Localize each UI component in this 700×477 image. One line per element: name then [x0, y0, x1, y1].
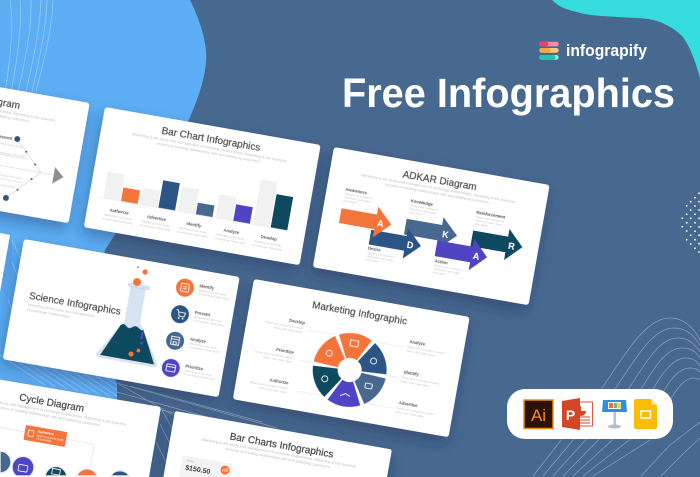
item: present [170, 304, 227, 331]
stage labels: resources, and make [344, 195, 371, 204]
intro text: process of creating relationships with and satisfying customers. [226, 447, 331, 469]
stage labels: Target your company's [344, 192, 374, 201]
item: analyze: Analyze [190, 336, 207, 344]
background contour lines: bottom right [533, 318, 700, 476]
heading: Bar Charts Infographics [229, 431, 334, 461]
bar labels: Marketing is the study [104, 213, 133, 221]
stage labels: Target your company's [475, 215, 505, 224]
bar labels: Marketing is the study [254, 239, 283, 248]
stage labels: Reinforcement [476, 210, 506, 220]
cycle nodes [0, 451, 129, 476]
logo wordmark: infograpify [566, 42, 648, 60]
bar labels: Analyze [223, 227, 240, 235]
stage labels: Action [434, 258, 448, 266]
stage labels: sure plans [366, 257, 380, 264]
item: prioritize [160, 358, 217, 385]
card text and box [0, 384, 129, 474]
arrow: R: R [507, 241, 516, 252]
bar labels: of exchange relationship [102, 216, 134, 226]
background lines: left diagonals [0, 240, 117, 397]
intro text: Marketing is the study and management of exchange relationships. Marketing is the business [202, 438, 357, 469]
decoration: dot pattern [681, 192, 700, 253]
labels right: share, and make plans [406, 348, 436, 358]
item: identify: of exchange relationship [198, 292, 230, 301]
background blob: light blue [0, 0, 206, 400]
box: authorize [23, 425, 67, 447]
labels right: Target your company's market [406, 345, 445, 355]
item: identify: Identify [199, 283, 215, 291]
panel: ADKAR diagram [313, 147, 550, 305]
labels left: Prioritize [276, 347, 295, 355]
bar labels: of exchange relationship [176, 229, 208, 239]
bar labels: Marketing is the study [141, 219, 170, 228]
item: analyze [165, 330, 222, 358]
intro text: process of creating relationships with and satisfying customers. [156, 142, 261, 164]
icon: flask [96, 262, 173, 367]
icon: PowerPoint: P [566, 407, 575, 423]
stage labels: Knowledge [410, 198, 434, 207]
arrow: A orange: A [376, 218, 385, 229]
arrow: D: D [406, 240, 415, 251]
node icons [18, 464, 60, 475]
labels left [248, 313, 306, 396]
item: identify: Marketing is the study [198, 288, 227, 297]
item: prioritize: Marketing is the study [184, 368, 213, 377]
main title: Free Infographics [342, 70, 675, 116]
stage labels: resources, and make [475, 218, 502, 227]
labels right: Target your company's market [395, 406, 434, 416]
stage labels: sure plans [474, 222, 488, 228]
item: present: Present [194, 310, 211, 318]
panel: app icons [507, 389, 673, 439]
arrow: D [367, 222, 424, 261]
bar labels: Marketing is the study [216, 232, 245, 241]
background blob: teal corner [552, 0, 700, 78]
bar labels: of exchange relationship [251, 243, 283, 252]
arrow: A purple: A [472, 251, 481, 262]
icon: PowerPoint [562, 398, 592, 430]
stage labels: Target your company's [434, 263, 463, 272]
box: authorize: of exchange [36, 436, 52, 443]
heading: ADKAR Diagram [402, 169, 478, 193]
stage labels: sure plans [409, 210, 423, 216]
card body [163, 411, 392, 477]
labels right: share, and make plans [400, 379, 430, 388]
intro text: Marketing is the study and management [27, 303, 95, 318]
labels left: Target your company's market [254, 349, 293, 360]
bar labels: of exchange relationship [214, 236, 246, 245]
arrow: K [402, 211, 460, 251]
leader lines [295, 330, 404, 408]
arrow: A orange [337, 200, 394, 240]
background lines: centre fan [117, 383, 277, 462]
box: authorize: Authorize [37, 430, 54, 436]
intro text: Marketing is the study and management of exchange relationships. Marketing is the business [361, 173, 516, 204]
bar labels: Authorize [109, 207, 130, 216]
card body [0, 380, 161, 477]
labels left: Target your company's market [249, 380, 288, 390]
bar labels [102, 206, 285, 252]
heading: Marketing Infographic [311, 300, 408, 328]
stage labels: Awareness [345, 187, 368, 196]
background lines: top left [5, 0, 53, 92]
labels left: share, and make plans [258, 385, 288, 394]
box: authorize: Marketing is the study [37, 433, 65, 442]
stage labels: sure plans [343, 198, 357, 205]
fishbone chart [0, 127, 69, 210]
logo: infograpify [539, 42, 648, 60]
heading: Cycle Diagram [18, 392, 85, 415]
stage labels: Target your company's [367, 250, 397, 259]
stat box background [179, 455, 232, 477]
intro text: process of creating relationships with and satisfying customers. [385, 182, 490, 205]
icon: Keynote [602, 400, 627, 428]
labels right [395, 339, 446, 420]
stat value: $150.50 [185, 465, 211, 476]
donut chart [310, 331, 389, 409]
item: present: of exchange relationship [193, 318, 225, 328]
labels right: Analyze [409, 339, 426, 347]
panel: bar charts infographics [163, 411, 392, 477]
labels right: Advertise [398, 400, 419, 408]
heading: Science Infographics [28, 291, 122, 318]
bar labels: Marketing is the study [179, 226, 208, 235]
stage labels: resources, and make [366, 254, 394, 263]
bar labels: Develop [260, 234, 278, 242]
icon: Illustrator: Ai [531, 406, 546, 425]
arrow: K: K [441, 229, 450, 240]
intro text: Marketing is the study and management of exchange relationships. Marketing is the business [132, 132, 287, 163]
stage labels: Target your company's [410, 203, 440, 212]
labels left: Develop [289, 318, 306, 326]
icon: Google Slides [634, 399, 657, 429]
stage labels [333, 187, 506, 285]
bar labels: Advertise [147, 214, 167, 222]
item: prioritize: Prioritize [185, 363, 204, 372]
intro text: of exchange relationships. [26, 308, 71, 319]
heading: Bar Chart Infographics [161, 126, 261, 154]
stage labels: sure plans [432, 270, 447, 276]
item: prioritize: of exchange relationship [184, 372, 216, 381]
stat value: Sales [186, 458, 195, 464]
stat value [185, 458, 230, 477]
panel: marketing infographic [233, 279, 470, 437]
stage labels: resources, and make [409, 207, 437, 215]
bar labels: Identify [186, 221, 202, 229]
item: identify [175, 277, 232, 304]
labels right: share, and make plans [395, 410, 425, 419]
panel: science infographics [3, 239, 240, 397]
labels left: Authorize [269, 377, 290, 386]
bar chart [99, 152, 299, 231]
panel: fishbone diagram [0, 65, 90, 223]
labels left: share, and make plans [273, 325, 303, 334]
arrow: R [469, 223, 525, 263]
icon: Illustrator [524, 400, 553, 428]
item: present: Marketing is the study [194, 315, 223, 324]
labels left: share, and make plans [263, 355, 293, 364]
labels right: Target your company's market [401, 375, 440, 386]
stage labels: resources, and make [433, 267, 461, 275]
arrow: A purple [433, 232, 490, 273]
panel: partial slide at left edge [0, 233, 10, 292]
stage labels: Desire [368, 245, 382, 253]
donut icons [319, 336, 379, 401]
labels right: Identify [404, 370, 420, 377]
panel: bar chart infographics [84, 107, 321, 265]
labels left: Target your company's market [265, 320, 304, 330]
panel: cycle diagram [0, 380, 161, 477]
item: analyze: of exchange relationship [188, 345, 220, 354]
logo icon [539, 42, 559, 60]
connectors [0, 427, 94, 469]
bar labels: of exchange relationship [139, 223, 171, 232]
item: analyze: Marketing is the study [189, 341, 218, 350]
card text [185, 425, 359, 477]
